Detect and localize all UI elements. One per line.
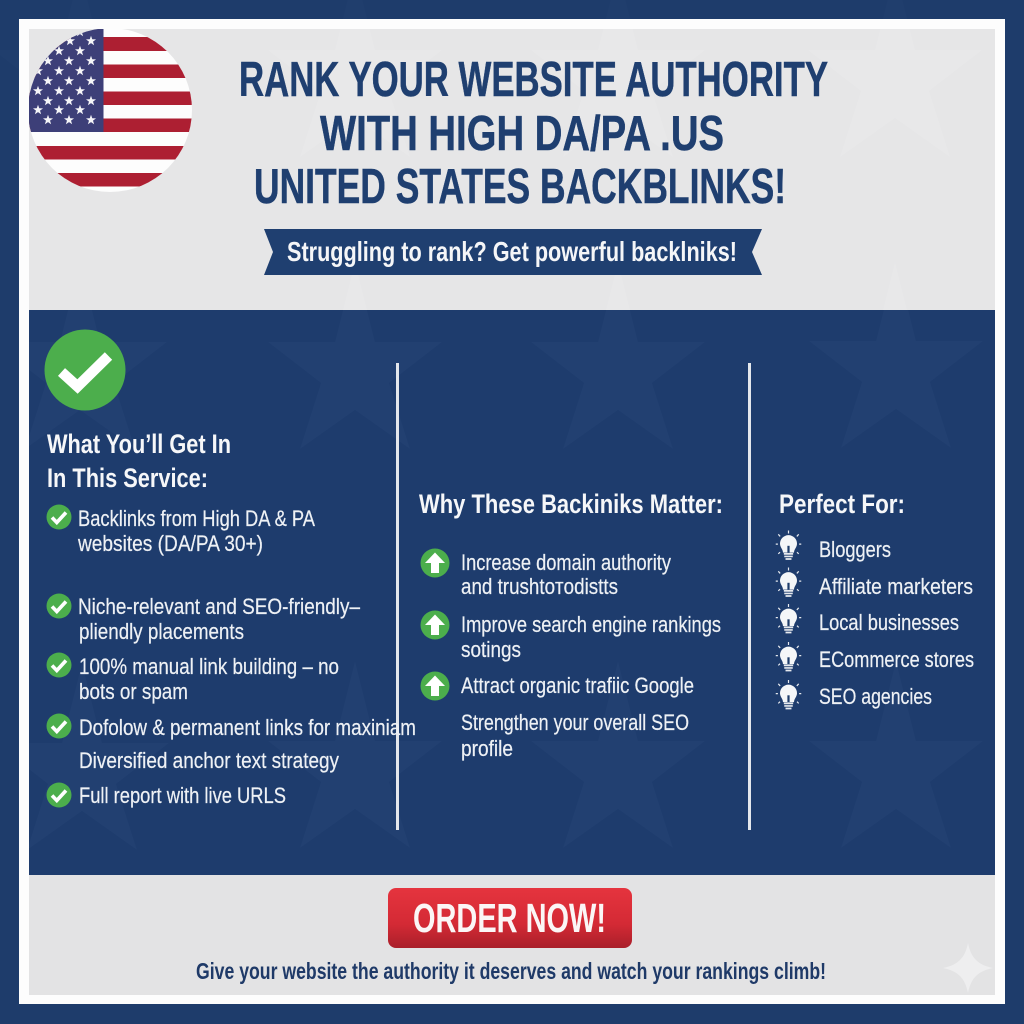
tagline: Give your website the authority it deserves and watch your rankings climb! [196,958,826,984]
list: audiences: Bloggers [819,537,891,562]
title [239,53,828,214]
heading: what you'll get: In This Service: [47,463,208,493]
list: service features: 100% manual link building – no [79,654,339,679]
column 3: perfect for [776,489,974,709]
button: order now [388,888,632,948]
list: audiences: Local businesses [819,610,959,635]
list: benefits: Increase domain authority [461,550,672,575]
list: benefits: profile [461,736,513,761]
list: service features: bots or spam [79,679,188,704]
list: benefits [420,548,721,761]
list: service features [46,504,416,808]
heading: what you'll get [47,429,231,493]
list: benefits: Strengthen your overall SEO [461,710,689,735]
column 2: why these backlinks matter [419,489,723,761]
list: audiences [776,530,974,709]
title: WITH HIGH DA/PA .US [320,107,724,161]
column 1: what you'll get [46,429,416,808]
list: service features: Niche-relevant and SEO-friendly– [78,594,360,619]
list: audiences: SEO agencies [819,684,932,709]
list: service features: websites (DA/PA 30+) [77,531,263,556]
heading: what you'll get: What You’ll Get In [47,429,231,459]
list: service features: pliendly placements [79,619,244,644]
button: order now: ORDER NOW! [413,895,606,941]
heading: why these backlinks matter: Why These Backiniks Matter: [419,489,723,519]
footer panel [29,875,995,995]
list: benefits: Attract organic trafiic Google [461,673,694,698]
icon: large green check [44,330,126,410]
banner ribbon: Struggling to rank? Get powerful backlniks! [287,236,737,267]
list: service features: Diversified anchor text strategy [79,748,340,773]
list: service features: Dofolow & permanent links for maxiniam [79,715,416,740]
list: service features: Full report with live URLS [79,783,286,808]
list: benefits: and trushtoтodistts [461,574,618,599]
list: audiences: Affiliate marketers [819,574,973,599]
header panel [29,29,995,310]
list: benefits: sotings [461,637,521,662]
banner ribbon [264,229,762,275]
list: service features: Backlinks from High DA & PA [78,506,315,531]
title: UNITED STATES BACKBLINKS! [254,160,786,214]
list: benefits: Improve search engine rankings [461,612,721,637]
heading: perfect for: Perfect For: [779,489,905,519]
list: audiences: ECommerce stores [819,647,974,672]
icon: US flag circle [29,27,192,192]
panel: navy main section [29,310,995,875]
